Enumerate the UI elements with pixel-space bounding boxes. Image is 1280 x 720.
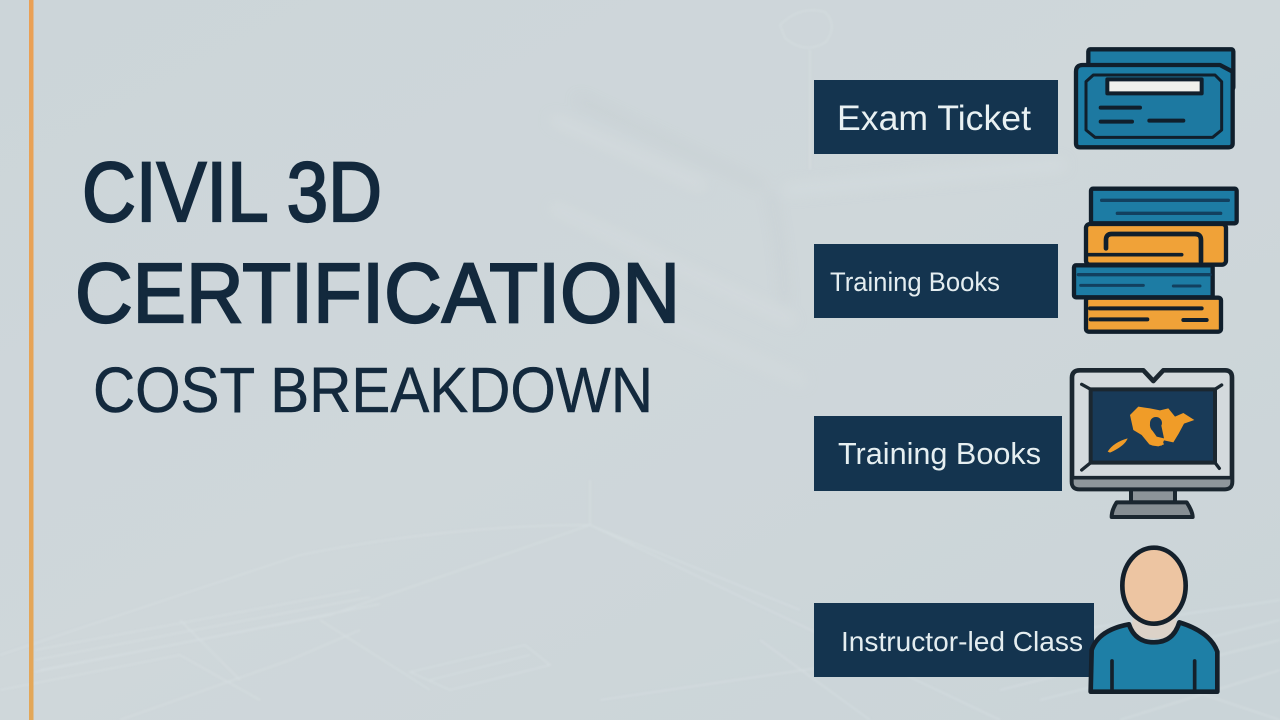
label: Exam Ticket: Exam Ticket — [837, 99, 1031, 138]
label: Training Books (first) — [814, 244, 1058, 318]
neck — [1128, 615, 1180, 638]
monitor stand — [1112, 488, 1193, 517]
torso — [1091, 622, 1217, 692]
label: Instructor-led Class — [814, 603, 1094, 677]
map shape — [1108, 407, 1194, 453]
label: Instructor-led Class: Instructor-led Class — [841, 626, 1083, 657]
icon: stack of books — [1074, 189, 1237, 332]
icon: exam ticket — [1076, 49, 1233, 147]
monitor body — [1072, 370, 1232, 489]
title line: CIVIL 3D: CIVIL 3D — [82, 145, 382, 239]
monitor screen — [1091, 389, 1215, 463]
orange vertical accent line — [29, 0, 34, 720]
title line: CERTIFICATION: CERTIFICATION — [75, 246, 680, 340]
label: Training Books (first): Training Books — [830, 267, 1000, 297]
icon: instructor person — [1091, 548, 1217, 692]
label: Training Books (second): Training Books — [838, 436, 1041, 471]
title — [75, 145, 680, 426]
head — [1122, 548, 1186, 624]
icon: computer monitor with open book frame — [1072, 370, 1232, 517]
label: Training Books (second) — [814, 416, 1062, 491]
subtitle: COST BREAKDOWN: COST BREAKDOWN — [93, 354, 653, 426]
label: Exam Ticket — [814, 80, 1058, 154]
